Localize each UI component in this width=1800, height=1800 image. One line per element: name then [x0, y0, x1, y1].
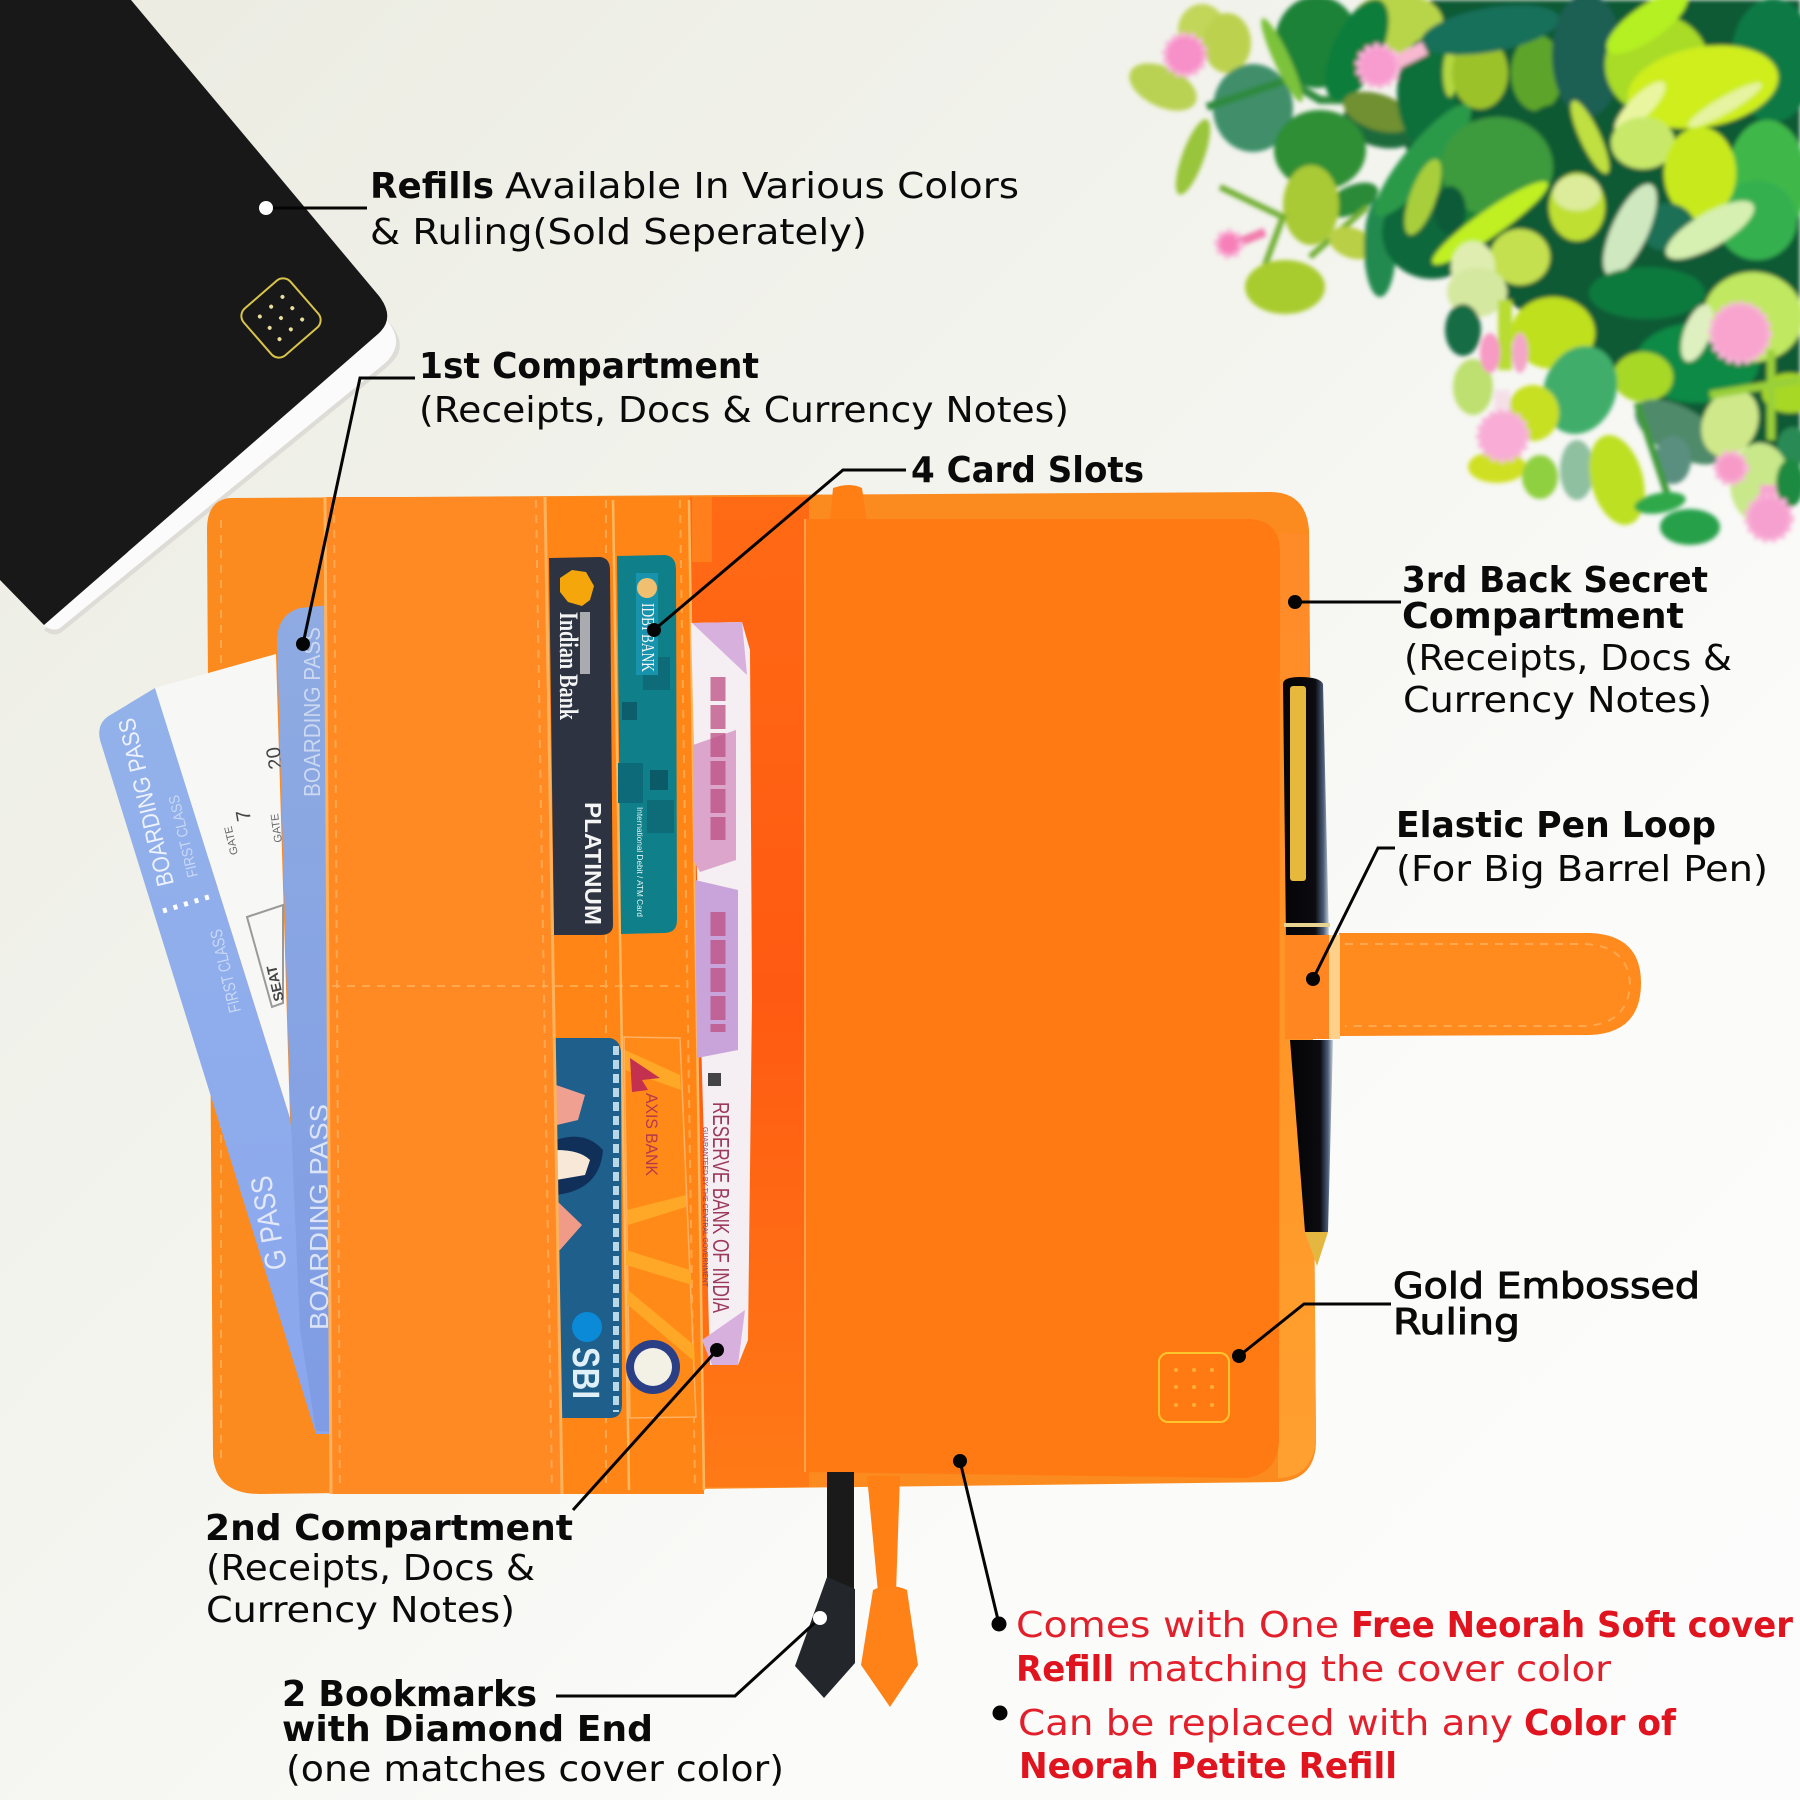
callout: free refill note in red: Color of: [1524, 1703, 1676, 1744]
card: IDBI Bank: International Debit / ATM Card: [635, 807, 644, 917]
boarding pass tickets: [99, 605, 338, 1434]
callout: gold embossed ruling: [1232, 1266, 1700, 1363]
callout: 2nd compartment: Currency Notes): [206, 1590, 515, 1631]
currency note: RESERVE BANK OF INDIA: [708, 1102, 734, 1313]
flower: [1711, 304, 1769, 362]
pocket strip behind card slots: [545, 497, 704, 1494]
card: Indian Bank Platinum: [549, 557, 613, 935]
card: Axis Bank: [624, 1037, 696, 1418]
flower: [1716, 453, 1746, 483]
callout: 3rd back secret compartment: [1288, 560, 1732, 721]
elastic bookmark tab at top: [830, 485, 867, 522]
first compartment pocket: [325, 497, 562, 1494]
back boarding pass: BOARDING PASS: [299, 627, 325, 797]
card: IDBI Bank: IDBI BANK: [638, 603, 658, 672]
callout: refills: [259, 166, 1019, 253]
front blue ticket: FIRST CLASS: [166, 793, 202, 879]
callout: refills: & Ruling(Sold Seperately): [370, 212, 867, 253]
callout: 4 card slots: [647, 450, 1144, 637]
flower: [1358, 46, 1425, 86]
currency note: [691, 622, 752, 1365]
right wallet strip: [1278, 532, 1316, 1478]
slot stitching: [555, 500, 695, 1490]
white ticket middle: [155, 654, 290, 1118]
white ticket middle: 7: [232, 808, 256, 823]
callout: free refill note in red: Neorah Petite Refill: [1019, 1746, 1397, 1787]
callout: 2 bookmarks: with Diamond End: [282, 1709, 653, 1750]
card: Axis Bank: AXIS BANK: [642, 1093, 661, 1177]
bookmark orange with diamond end: [861, 1476, 918, 1707]
callout: gold embossed ruling: Gold Embossed: [1393, 1266, 1700, 1307]
card: SBI: [555, 1038, 622, 1418]
black refill notebook: [0, 0, 400, 635]
front blue ticket: BOARDING PASS: [113, 715, 180, 889]
plant with pink flowers: [1122, 0, 1800, 545]
callout: elastic pen loop: Elastic Pen Loop: [1396, 805, 1716, 846]
callout: 2 bookmarks: (one matches cover color): [286, 1749, 784, 1790]
callout: elastic pen loop: [1306, 805, 1768, 986]
currency note: GUARANTEED BY THE CENTRAL GOVERNMENT: [701, 1127, 708, 1288]
callout: refills: Available In Various Colors: [505, 166, 1019, 207]
callout: 3rd back secret compartment: Currency Notes): [1403, 680, 1712, 721]
refill page edges: [44, 318, 400, 635]
callout: free refill note in red: Comes with One: [1016, 1605, 1339, 1646]
pen: [1283, 677, 1333, 1266]
callout: 2 bookmarks: 2 Bookmarks: [282, 1674, 537, 1715]
wallet open orange cover: [207, 492, 1316, 1494]
callout: 2nd compartment: (Receipts, Docs &: [206, 1548, 535, 1589]
card: IDBI Bank: [617, 555, 677, 934]
card: Indian Bank Platinum: PLATINUM: [580, 802, 606, 925]
flower: [1217, 232, 1265, 256]
back boarding pass: BOARDING PASS: [304, 1104, 334, 1330]
white ticket middle: SEAT: [263, 964, 287, 1003]
callout: refills: Refills: [370, 166, 494, 207]
bookmark black with diamond end: [795, 1472, 855, 1698]
elastic pen loop: [1285, 935, 1340, 1039]
callout: free refill note in red: [953, 1454, 1793, 1787]
front blue ticket: [99, 688, 330, 1434]
orange notebook cover: [805, 519, 1280, 1478]
flower: [1747, 485, 1791, 540]
embossed gold emblem on refill: [237, 274, 325, 362]
callout: 3rd back secret compartment: 3rd Back Secret: [1402, 560, 1708, 601]
embossed gold ruling mark: [1159, 1353, 1229, 1422]
white ticket middle: 20: [262, 745, 288, 771]
callout: free refill note in red: Refill: [1016, 1649, 1114, 1690]
callout: 1st compartment: (Receipts, Docs & Currency Notes): [419, 390, 1069, 431]
cards in slots: [549, 555, 752, 1418]
card: SBI: SBI: [564, 1347, 606, 1399]
flower: [1479, 412, 1527, 460]
callout: 2 bookmarks: [282, 1611, 827, 1790]
card: Indian Bank Platinum: Indian Bank: [554, 612, 583, 720]
callout: 1st compartment: 1st Compartment: [419, 346, 759, 387]
callout: 2nd compartment: 2nd Compartment: [205, 1508, 573, 1549]
back boarding pass: [277, 605, 338, 1432]
flower: [1165, 35, 1205, 75]
closure strap: [1339, 933, 1641, 1036]
refill black cover: [0, 0, 387, 625]
callout: free refill note in red: matching the cover color: [1127, 1649, 1611, 1690]
right red-orange inner panel: [689, 497, 809, 1487]
callout: 2nd compartment: [205, 1343, 724, 1631]
white ticket middle: GATE: [223, 825, 241, 856]
notebook left highlight edge: [804, 519, 806, 1472]
white ticket middle: GATE: [269, 813, 285, 843]
callout: 3rd back secret compartment: (Receipts, Docs &: [1404, 638, 1732, 679]
callout: free refill note in red: Can be replaced with any: [1018, 1703, 1513, 1744]
callout: 4 card slots: 4 Card Slots: [911, 450, 1144, 491]
callout: 3rd back secret compartment: Compartment: [1402, 596, 1684, 637]
front blue ticket: G PASS: [245, 1173, 294, 1273]
callout: 1st compartment: [296, 346, 1069, 651]
callout: gold embossed ruling: Ruling: [1393, 1302, 1520, 1343]
front blue ticket: FIRST CLASS: [207, 927, 245, 1015]
callout: elastic pen loop: (For Big Barrel Pen): [1396, 849, 1768, 890]
